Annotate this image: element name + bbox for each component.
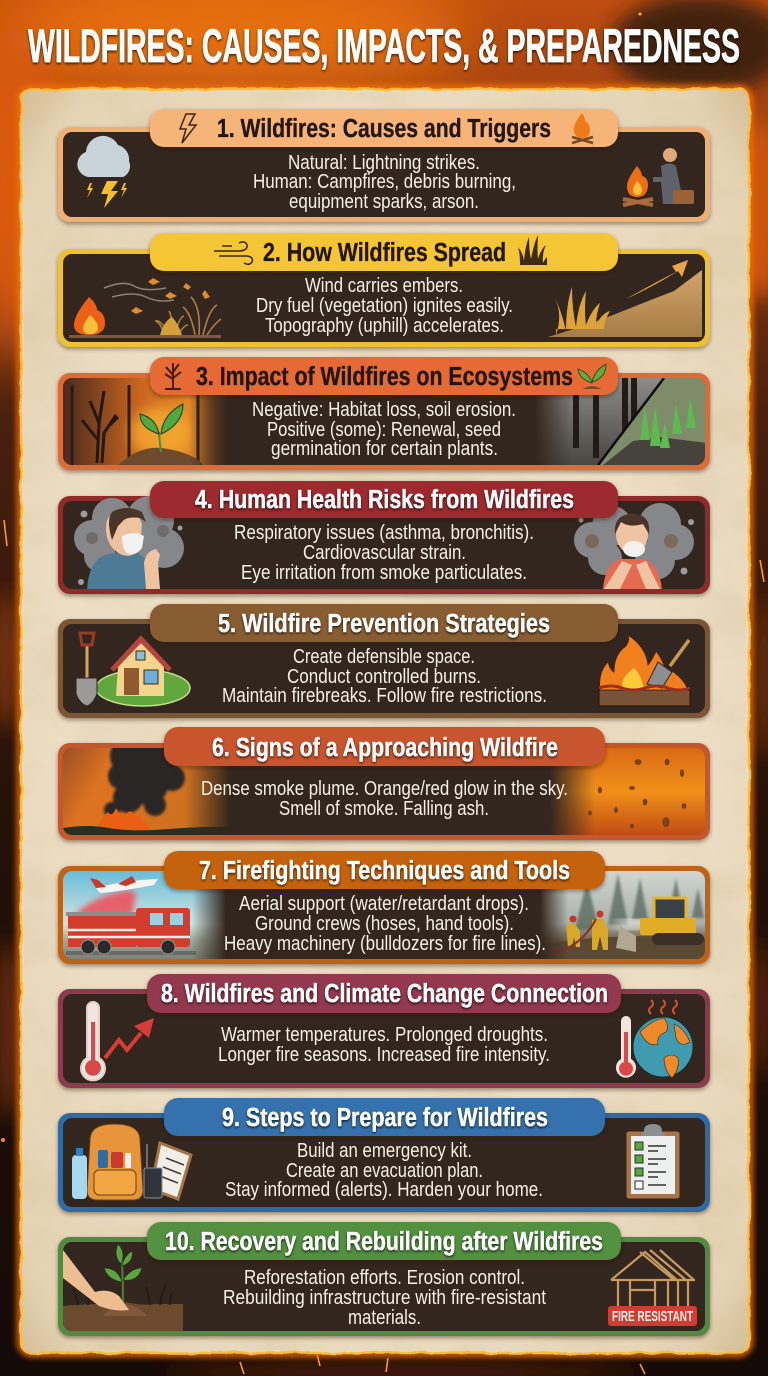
heading pill 1: 1. Wildfires: Causes and Triggers bbox=[217, 115, 551, 143]
content text: materials. bbox=[348, 1306, 421, 1329]
content text: Maintain firebreaks. Follow fire restrictions. bbox=[222, 684, 547, 707]
icon: wind-blown embers and brush bbox=[69, 278, 221, 338]
content text: Dense smoke plume. Orange/red glow in the sky. bbox=[201, 777, 568, 800]
content text: Reforestation efforts. Erosion control. bbox=[244, 1266, 525, 1289]
content text: Wind carries embers. bbox=[305, 274, 463, 297]
content text: equipment sparks, arson. bbox=[289, 190, 479, 213]
content text: Build an emergency kit. bbox=[297, 1139, 472, 1162]
illustration: falling ash bbox=[550, 748, 710, 835]
heading pill 6: 6. Signs of a Approaching Wildfire bbox=[212, 734, 558, 762]
content text: Conduct controlled burns. bbox=[287, 665, 481, 688]
content text bbox=[225, 1139, 543, 1201]
content text: Create defensible space. bbox=[293, 645, 475, 668]
heading pill 4 bbox=[150, 481, 618, 518]
icon: checklist clipboard bbox=[626, 1124, 680, 1199]
content text: Heavy machinery (bulldozers for fire lines). bbox=[224, 932, 546, 955]
heading pill 1 bbox=[150, 109, 618, 147]
icon: fire-resistant house frame: FIRE RESISTANT bbox=[612, 1308, 693, 1325]
content text: Dry fuel (vegetation) ignites easily. bbox=[256, 294, 513, 317]
content text bbox=[234, 521, 534, 584]
icon: warming globe bbox=[616, 1000, 693, 1078]
icon: man coughing in mask bbox=[74, 496, 184, 589]
heading pill 10 bbox=[147, 1222, 621, 1260]
content text: Aerial support (water/retardant drops). bbox=[239, 892, 529, 915]
heading pill 7 bbox=[164, 851, 605, 889]
card 5: prevention strategies bbox=[58, 604, 710, 718]
content text: Longer fire seasons. Increased fire intensity. bbox=[218, 1043, 550, 1066]
card 7: firefighting techniques bbox=[58, 851, 710, 964]
heading pill 4: 4. Human Health Risks from Wildfires bbox=[195, 486, 574, 514]
heading pill 9 bbox=[164, 1098, 605, 1136]
content text: Warmer temperatures. Prolonged droughts. bbox=[221, 1023, 548, 1046]
illustration: smoke plume bbox=[63, 748, 228, 835]
card 1: causes and triggers bbox=[58, 109, 710, 222]
card 8: climate change connection bbox=[58, 974, 710, 1088]
card 3: impact on ecosystems bbox=[58, 357, 710, 470]
content text bbox=[222, 645, 547, 707]
illustration: crews and bulldozer bbox=[540, 871, 710, 959]
content text: Rebuilding infrastructure with fire-resistant bbox=[223, 1286, 546, 1309]
icon: hand planting sapling bbox=[63, 1244, 183, 1332]
content text: Smell of smoke. Falling ash. bbox=[279, 797, 489, 820]
content text: Human: Campfires, debris burning, bbox=[253, 170, 516, 193]
content text: Respiratory issues (asthma, bronchitis). bbox=[234, 521, 534, 544]
content text: Topography (uphill) accelerates. bbox=[265, 314, 504, 337]
heading pill 5: 5. Wildfire Prevention Strategies bbox=[218, 610, 550, 638]
card 6: signs of approaching wildfire bbox=[58, 727, 710, 840]
heading pill 3 bbox=[150, 357, 618, 395]
illustration: burned forest with sprout bbox=[63, 378, 236, 465]
heading pill 7: 7. Firefighting Techniques and Tools bbox=[199, 857, 570, 885]
content text: Eye irritation from smoke particulates. bbox=[241, 561, 527, 584]
icon: uphill slope with arrow bbox=[548, 260, 702, 337]
content text bbox=[223, 1266, 546, 1329]
content text: Natural: Lightning strikes. bbox=[288, 151, 480, 174]
content text: Ground crews (hoses, hand tools). bbox=[255, 912, 514, 935]
content text: Cardiovascular strain. bbox=[303, 541, 466, 564]
card 9: steps to prepare bbox=[58, 1098, 710, 1212]
card 10: recovery and rebuilding bbox=[58, 1222, 710, 1336]
heading pill 6 bbox=[164, 727, 605, 766]
content text bbox=[218, 1023, 550, 1066]
heading pill 10: 10. Recovery and Rebuilding after Wildfires bbox=[165, 1228, 603, 1256]
heading pill 8: 8. Wildfires and Climate Change Connection bbox=[161, 980, 608, 1008]
illustration: burned and regrowing forest bbox=[535, 378, 710, 465]
heading pill 9: 9. Steps to Prepare for Wildfires bbox=[222, 1104, 548, 1132]
content text bbox=[256, 274, 513, 337]
heading pill 8 bbox=[147, 974, 621, 1013]
icon: controlled burn with shovel bbox=[599, 635, 690, 706]
content text: Negative: Habitat loss, soil erosion. bbox=[252, 398, 516, 421]
icon: thermometer and rising arrow bbox=[81, 1002, 154, 1080]
heading pill 2: 2. How Wildfires Spread bbox=[263, 239, 506, 267]
card 4: human health risks bbox=[58, 481, 710, 594]
icon: shovel and defensible house bbox=[76, 633, 190, 706]
content text: germination for certain plants. bbox=[271, 437, 498, 460]
content text: Create an evacuation plan. bbox=[286, 1159, 483, 1182]
heading pill 3: 3. Impact of Wildfires on Ecosystems bbox=[196, 363, 573, 391]
illustration: air tanker and fire engine bbox=[63, 871, 236, 959]
icon: person at campfire bbox=[623, 148, 694, 205]
icon: emergency backpack kit bbox=[72, 1124, 191, 1200]
content text: Stay informed (alerts). Harden your home. bbox=[225, 1178, 543, 1201]
content text bbox=[224, 892, 546, 955]
content text: Positive (some): Renewal, seed bbox=[267, 418, 501, 441]
icon: fire-resistant house frame bbox=[608, 1250, 697, 1326]
icon: storm cloud bbox=[77, 136, 130, 208]
content text bbox=[252, 398, 516, 460]
content text bbox=[201, 777, 568, 820]
card 2: how wildfires spread bbox=[58, 233, 710, 347]
content text bbox=[253, 151, 516, 213]
heading pill 2 bbox=[150, 233, 618, 271]
heading pill 5 bbox=[150, 604, 618, 642]
icon: person covering face bbox=[574, 503, 694, 589]
